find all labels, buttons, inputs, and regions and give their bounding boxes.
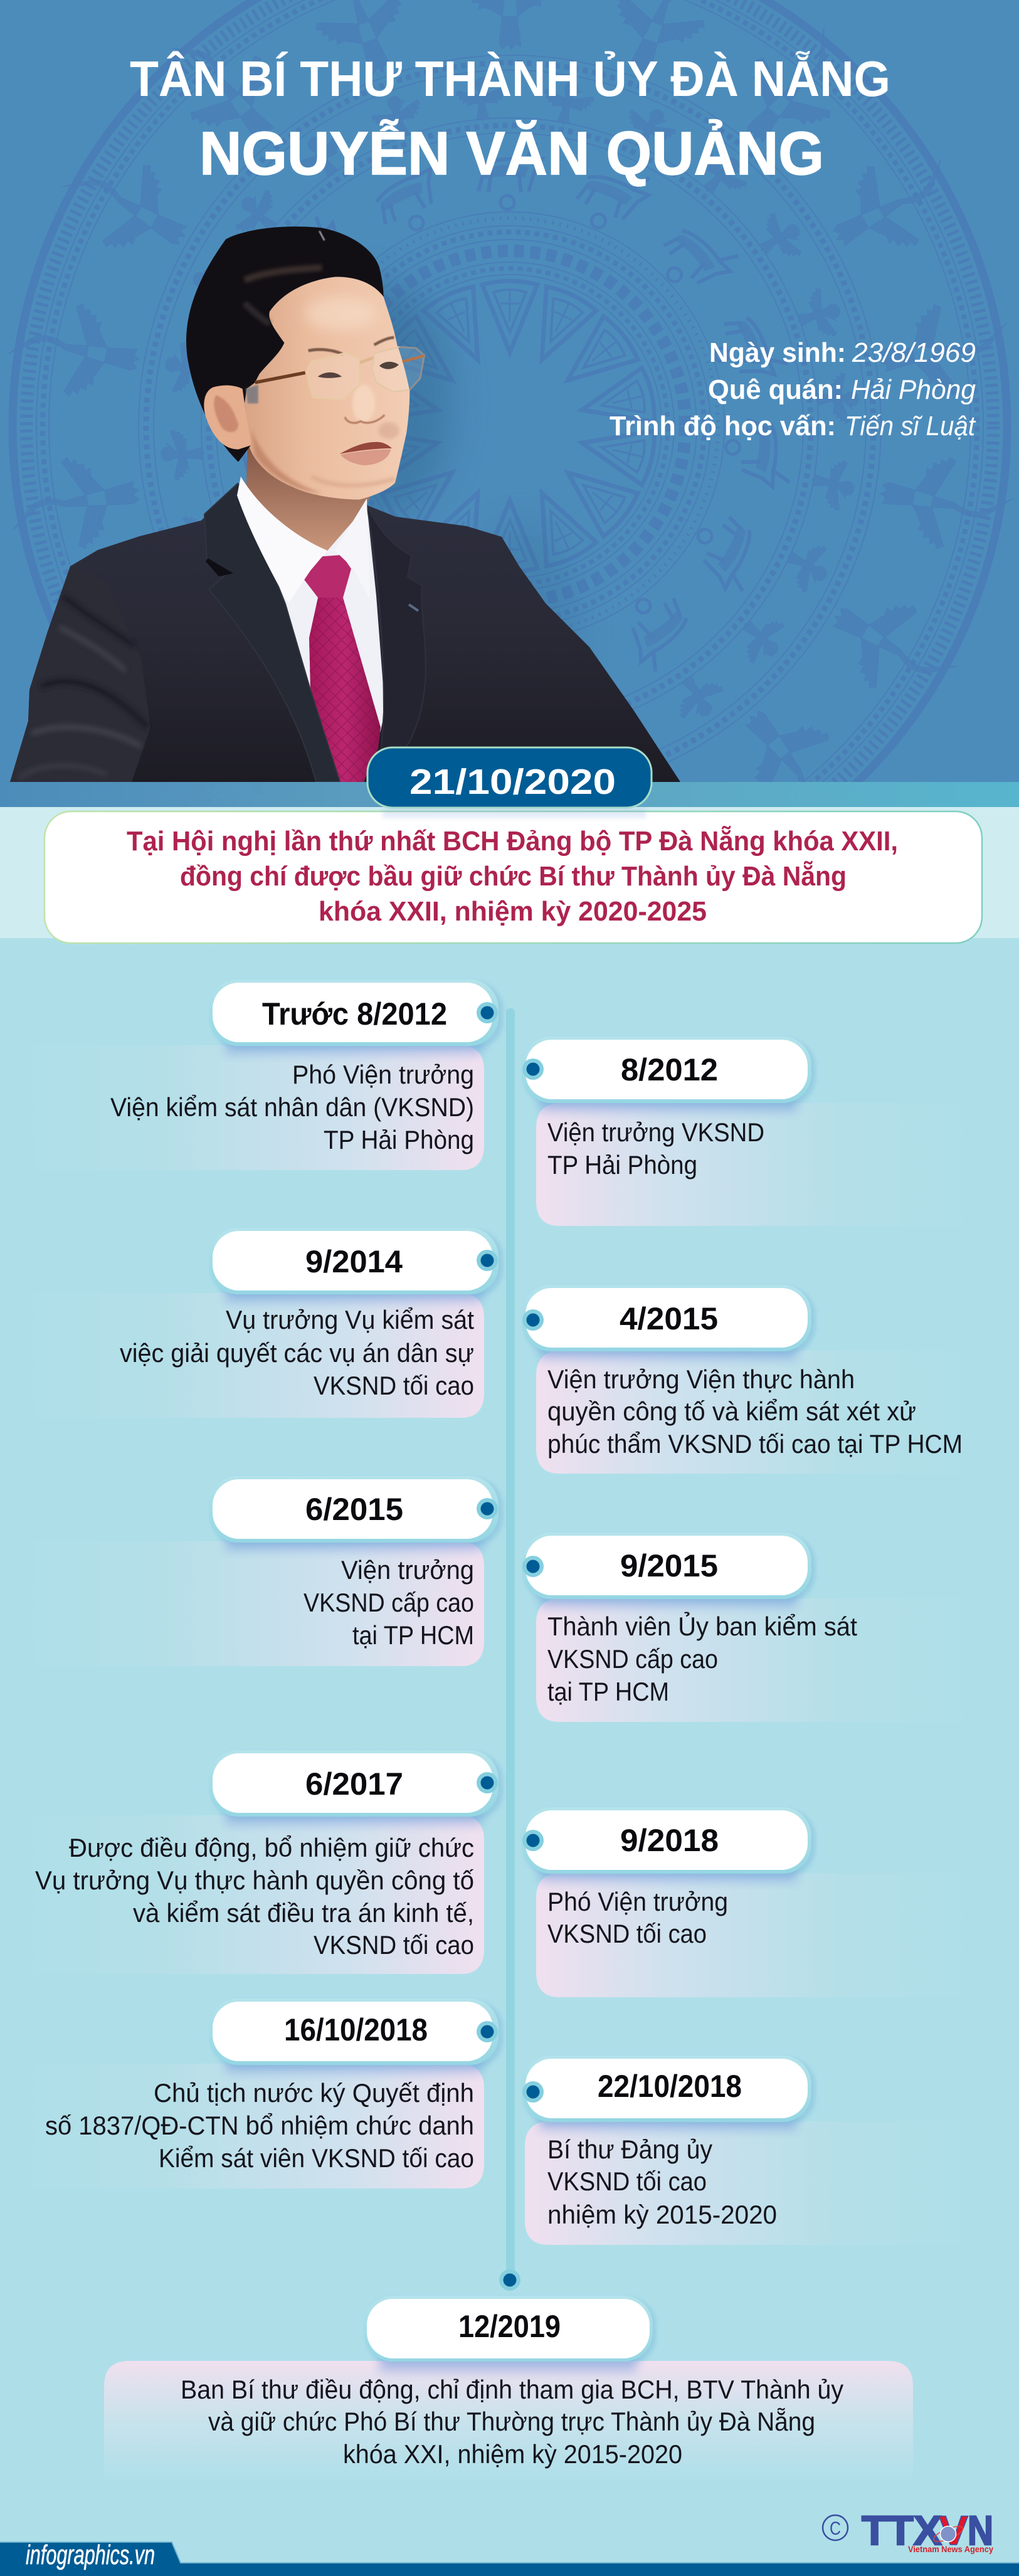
eyebrows and eyes <box>309 349 343 354</box>
timeline entry: Trước 8/2012: Phó Viện trưởng <box>292 1060 474 1089</box>
timeline entry: 9/2018: VKSND tối cao <box>547 1919 707 1948</box>
personal information: 23/8/1969 <box>852 337 976 368</box>
lips <box>340 442 392 454</box>
timeline entry: 4/2015 <box>522 1285 975 1474</box>
timeline entry: 22/10/2018 <box>522 2056 975 2245</box>
timeline entry: 22/10/2018: 22/10/2018 <box>598 2069 742 2104</box>
timeline entry: 22/10/2018: VKSND tối cao <box>547 2167 707 2196</box>
timeline entry: 9/2015: tại TP HCM <box>547 1677 669 1706</box>
timeline entry: 9/2018: 9/2018 <box>620 1823 719 1858</box>
personal information: Hải Phòng <box>851 374 976 405</box>
timeline entry: 6/2017: Được điều động, bổ nhiệm giữ chức <box>69 1833 474 1862</box>
TTXVN logo: Vietnam News Agency <box>908 2544 993 2554</box>
timeline entry: 4/2015: 4/2015 <box>620 1301 718 1336</box>
timeline entry: 12/2019: và giữ chức Phó Bí thư Thường trực Thành ủy Đà Nẵng <box>208 2407 815 2436</box>
timeline entry: 16/10/2018: 16/10/2018 <box>284 2012 428 2047</box>
date badge <box>367 747 652 808</box>
personal information: Trình độ học vấn: <box>610 411 836 441</box>
timeline entry: 8/2012: 8/2012 <box>621 1052 718 1087</box>
title: NGUYỄN VĂN QUẢNG <box>199 119 824 187</box>
timeline entry: 6/2015: Viện trưởng <box>341 1555 474 1585</box>
timeline entry: 4/2015: quyền công tố và kiểm sát xét xử <box>547 1396 916 1426</box>
timeline entry: Trước 8/2012 <box>19 979 503 1170</box>
glasses <box>255 372 305 383</box>
portrait of Nguyễn Văn Quảng <box>10 226 680 782</box>
timeline entry: 6/2017: 6/2017 <box>305 1766 403 1802</box>
timeline entry: 6/2015 <box>19 1476 503 1666</box>
timeline entry: 6/2017: VKSND tối cao <box>314 1930 474 1960</box>
timeline entry: 8/2012 <box>522 1037 975 1226</box>
timeline entry: 22/10/2018: nhiệm kỳ 2015-2020 <box>547 2200 777 2229</box>
timeline entry: Trước 8/2012: Viện kiểm sát nhân dân (VKSND) <box>110 1092 474 1122</box>
timeline entry: 16/10/2018: Chủ tịch nước ký Quyết định <box>154 2078 474 2108</box>
timeline entry: 12/2019: khóa XXI, nhiệm kỳ 2015-2020 <box>343 2439 682 2469</box>
personal information: Tiến sĩ Luật <box>845 411 976 441</box>
jacket sleeve folds <box>10 566 150 782</box>
timeline entry: Trước 8/2012: Trước 8/2012 <box>262 996 447 1032</box>
title <box>130 51 890 187</box>
timeline entry: 9/2015: Thành viên Ủy ban kiểm sát <box>547 1611 857 1641</box>
timeline entry: 12/2019: Ban Bí thư điều động, chỉ định tham gia BCH, BTV Thành ủy <box>181 2375 843 2404</box>
title: TÂN BÍ THƯ THÀNH ỦY ĐÀ NẴNG <box>130 51 890 107</box>
personal information: Quê quán: <box>708 374 843 405</box>
footer bar with source <box>0 2540 1019 2576</box>
summary box <box>45 809 982 943</box>
timeline entry: 6/2015: tại TP HCM <box>352 1620 474 1650</box>
timeline entry: 22/10/2018: Bí thư Đảng ủy <box>547 2135 712 2164</box>
timeline entry: 9/2014: 9/2014 <box>305 1244 403 1279</box>
TTXVN logo <box>823 2507 993 2554</box>
timeline entry: 9/2015 <box>522 1533 975 1722</box>
TTXVN logo: N <box>968 2507 993 2553</box>
neck <box>246 447 370 551</box>
jacket lapels <box>204 483 426 782</box>
timeline entry: 9/2014: Vụ trưởng Vụ kiểm sát <box>226 1305 474 1334</box>
gradient band under the portrait <box>0 782 1019 807</box>
TTXVN logo: C <box>830 2518 841 2539</box>
footer bar with source: infographics.vn <box>26 2540 155 2570</box>
timeline end dot <box>499 2269 520 2291</box>
timeline entry: 16/10/2018: Kiểm sát viên VKSND tối cao <box>159 2143 474 2173</box>
timeline entry: 4/2015: Viện trưởng Viện thực hành <box>547 1365 855 1394</box>
timeline entry: 8/2012: TP Hải Phòng <box>547 1150 697 1180</box>
timeline entry: 6/2015: VKSND cấp cao <box>304 1588 474 1617</box>
header background: blue <box>0 0 1019 807</box>
timeline entry: 12/2019 <box>104 2296 913 2481</box>
date badge: 21/10/2020 <box>409 762 616 802</box>
ear <box>204 385 251 450</box>
necktie <box>304 555 381 782</box>
nose <box>345 415 384 423</box>
timeline spine <box>506 1008 515 2280</box>
bronze drum background pattern <box>6 0 1013 782</box>
personal information: Ngày sinh: <box>709 337 846 368</box>
pale strip behind summary box <box>0 807 1019 938</box>
TTXVN logo: V <box>939 2507 968 2553</box>
head <box>186 226 425 500</box>
timeline entry: 9/2018 <box>522 1807 975 1997</box>
shirt <box>278 511 383 782</box>
timeline entry: 9/2014 <box>19 1228 503 1418</box>
timeline entry: 9/2015: VKSND cấp cao <box>547 1644 718 1674</box>
timeline entry: 6/2017: và kiểm sát điều tra án kinh tế, <box>133 1898 474 1928</box>
timeline entry: 4/2015: phúc thẩm VKSND tối cao tại TP HCM <box>547 1429 963 1459</box>
timeline entry: 6/2015: 6/2015 <box>305 1492 403 1527</box>
hair <box>186 226 384 462</box>
shirt collar <box>237 477 370 603</box>
personal information <box>610 337 976 441</box>
timeline entry: 9/2018: Phó Viện trưởng <box>547 1887 728 1916</box>
timeline entry: Trước 8/2012: TP Hải Phòng <box>324 1125 474 1154</box>
summary box: Tại Hội nghị lần thứ nhất BCH Đảng bộ TP Đà Nẵng khóa XXII, <box>127 825 898 857</box>
TTXVN logo: TTX <box>862 2507 942 2553</box>
timeline entry: 12/2019: 12/2019 <box>458 2309 561 2344</box>
summary box: khóa XXII, nhiệm kỳ 2020-2025 <box>319 896 707 927</box>
timeline entry: 6/2017: Vụ trưởng Vụ thực hành quyền công tố <box>35 1866 474 1895</box>
timeline entry: 9/2014: VKSND tối cao <box>314 1371 474 1400</box>
jacket <box>10 483 680 782</box>
timeline entry: 9/2015: 9/2015 <box>620 1548 718 1583</box>
timeline entry: 9/2014: việc giải quyết các vụ án dân sự <box>120 1338 474 1368</box>
soft shadow behind the portrait <box>314 282 577 746</box>
timeline entry: 16/10/2018 <box>19 1998 503 2188</box>
summary box: đồng chí được bầu giữ chức Bí thư Thành ủy Đà Nẵng <box>180 860 847 892</box>
timeline entry: 16/10/2018: số 1837/QĐ-CTN bổ nhiệm chức danh <box>45 2111 474 2140</box>
timeline entry: 6/2017 <box>19 1750 503 1974</box>
timeline entry: 8/2012: Viện trưởng VKSND <box>547 1117 764 1147</box>
